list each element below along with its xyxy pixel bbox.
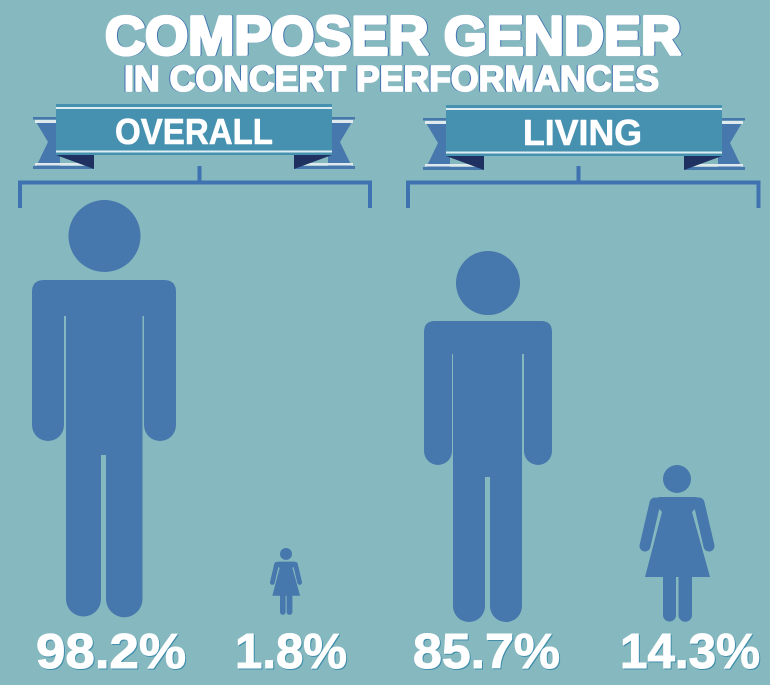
icon: female figure living 14.3% [645, 465, 710, 622]
bracket: overall [20, 166, 370, 208]
banner: living: LIVING [523, 112, 642, 153]
banner: overall: OVERALL [115, 111, 273, 152]
value: overall male: 98.2% [36, 625, 186, 679]
banner: living [423, 105, 745, 170]
icon: male figure living 85.7% [424, 251, 552, 622]
icon: female figure overall 1.8% [272, 548, 300, 615]
bracket: living [408, 166, 758, 208]
value: overall female: 1.8% [235, 625, 347, 679]
icon: male figure overall 98.2% [32, 200, 176, 617]
title: IN CONCERT PERFORMANCES [124, 58, 659, 99]
title [105, 4, 681, 99]
banner: overall [33, 104, 355, 169]
title: COMPOSER GENDER [105, 4, 681, 66]
value: living male: 85.7% [413, 625, 560, 679]
value: living female: 14.3% [620, 625, 760, 679]
